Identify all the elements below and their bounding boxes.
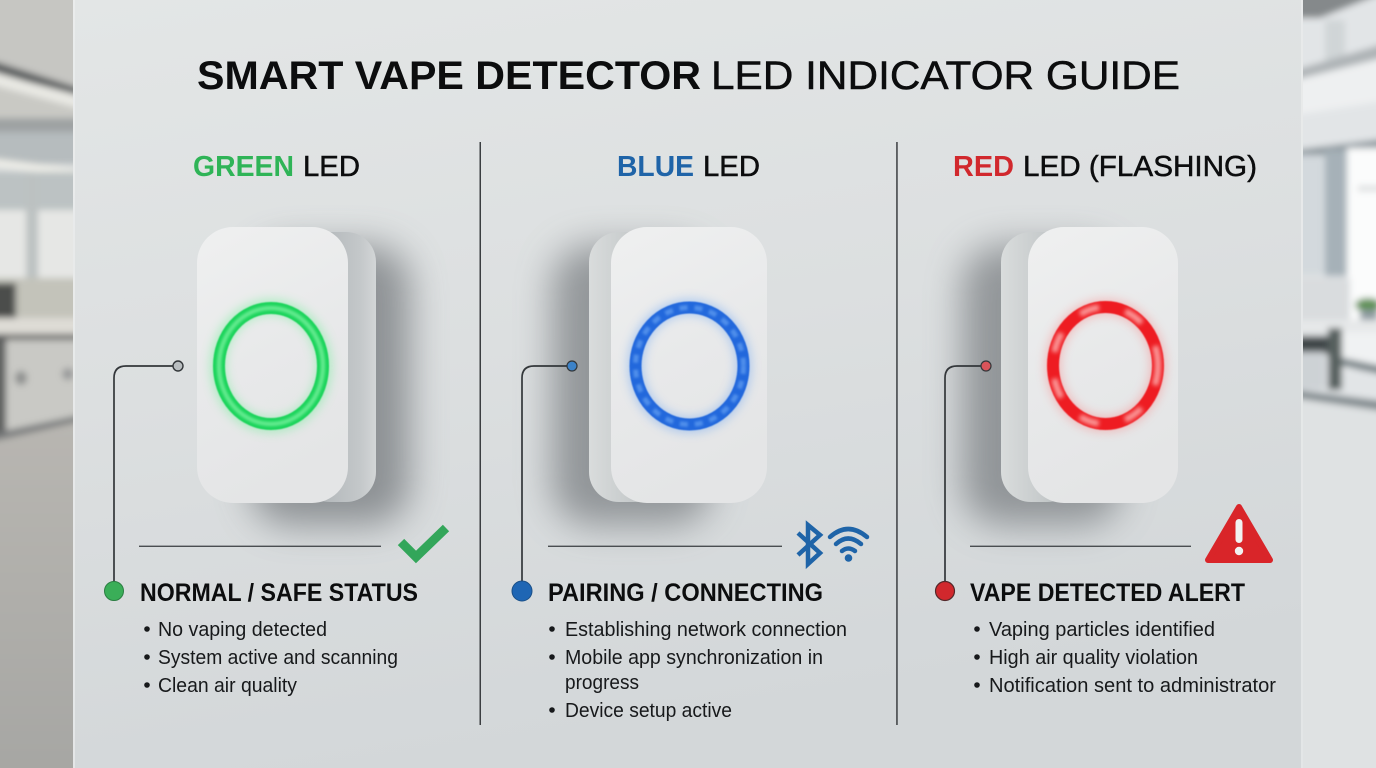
status: vape detected: VAPE DETECTED ALERT [970, 579, 1245, 607]
heading: green LED: GREEN [193, 151, 294, 183]
heading: green LED: LED [303, 151, 360, 183]
status: vape detected [970, 579, 1276, 697]
status: normal / safe: No vaping detected [158, 619, 327, 641]
device: red detector [962, 227, 1178, 525]
status: pairing / connecting: Establishing network connection [565, 619, 847, 641]
panel: red LED [936, 151, 1276, 697]
title [197, 54, 1180, 98]
heading: red LED: LED (FLASHING) [1023, 151, 1257, 183]
icon: bluetooth [798, 525, 820, 564]
heading: green LED [193, 151, 360, 183]
column dividers [480, 142, 898, 725]
panel: green LED [104, 151, 446, 697]
LED ring: green [218, 307, 324, 425]
title: LED INDICATOR GUIDE [711, 54, 1180, 98]
icon: warning triangle [1208, 507, 1270, 560]
status: pairing / connecting: progress [565, 672, 639, 694]
device: blue detector [552, 227, 767, 525]
device: green detector [197, 227, 410, 525]
status: pairing / connecting: Mobile app synchronization in [565, 647, 823, 669]
background: blurred office, right side [1303, 0, 1376, 412]
status: pairing / connecting [548, 579, 847, 722]
title: SMART VAPE DETECTOR [197, 54, 701, 98]
status: vape detected: High air quality violation [989, 647, 1198, 669]
background: blurred office, left side [0, 0, 73, 768]
icon: wifi [830, 529, 867, 562]
status: normal / safe: Clean air quality [158, 675, 297, 697]
status: pairing / connecting: PAIRING / CONNECTING [548, 579, 823, 607]
status: vape detected: Vaping particles identified [989, 619, 1215, 641]
connector: blue [512, 361, 577, 601]
icon: check mark [401, 528, 446, 557]
connector: green [104, 361, 183, 600]
heading: blue LED: BLUE [617, 151, 694, 183]
LED ring: red [1053, 307, 1158, 424]
status: normal / safe [140, 579, 418, 697]
status: pairing / connecting: Device setup active [565, 700, 732, 722]
status: normal / safe: System active and scanning [158, 647, 398, 669]
heading: blue LED [617, 151, 760, 183]
status: normal / safe: NORMAL / SAFE STATUS [140, 579, 418, 607]
panel: blue LED [512, 151, 867, 722]
heading: red LED: RED [953, 151, 1014, 183]
connector: red [936, 361, 991, 600]
LED ring: blue [636, 307, 744, 425]
heading: blue LED: LED [703, 151, 760, 183]
status: vape detected: Notification sent to administrator [989, 675, 1276, 697]
